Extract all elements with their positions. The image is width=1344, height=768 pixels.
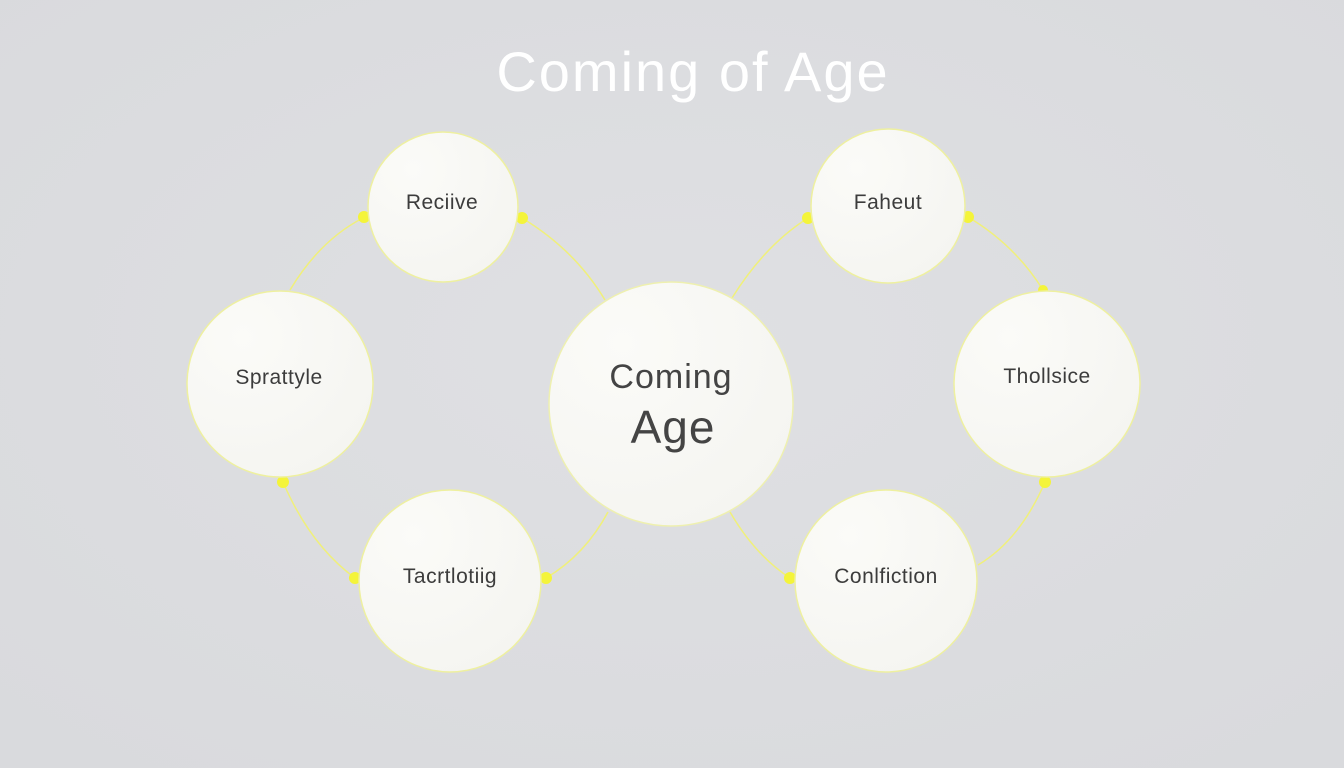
node: Thollsice [954, 291, 1140, 477]
node: Faheut [811, 129, 965, 283]
node: center: Coming [609, 358, 733, 396]
node: Conlfiction: Conlfiction [834, 565, 938, 588]
node: center: Age [631, 401, 715, 453]
node: Thollsice: Thollsice [1003, 365, 1091, 388]
title: Coming of Age [496, 40, 890, 103]
node: Sprattyle [187, 291, 373, 477]
node: Tacrtlotiig: Tacrtlotiig [403, 565, 497, 588]
node: Reciive: Reciive [406, 191, 478, 214]
node: Reciive [368, 132, 518, 282]
connector dots [277, 211, 1051, 584]
node: Conlfiction [795, 490, 977, 672]
node: Tacrtlotiig [359, 490, 541, 672]
node: center [549, 282, 793, 526]
node: Sprattyle: Sprattyle [235, 366, 323, 389]
connectors [283, 217, 1045, 578]
node: Faheut: Faheut [854, 191, 922, 214]
